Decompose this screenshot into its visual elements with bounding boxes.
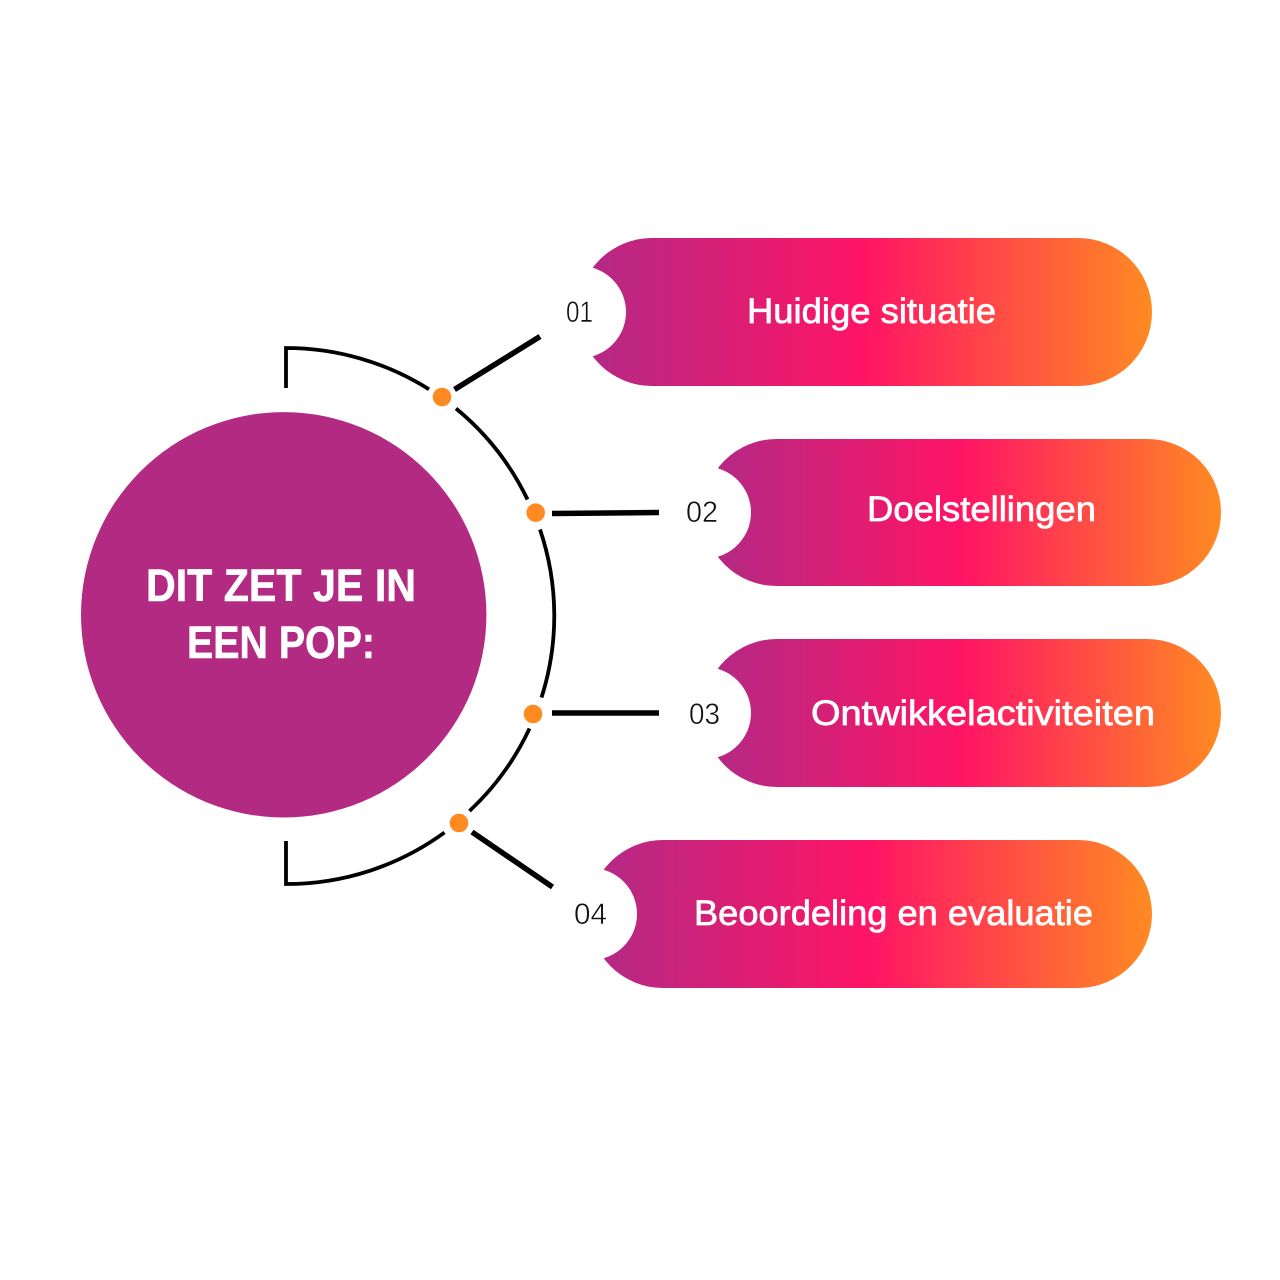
pill 02: Doelstellingen: Doelstellingen [867,490,1096,529]
pill 01: Huidige situatie: Huidige situatie [747,292,996,331]
pill 03: Ontwikkelactiviteiten [659,639,1221,787]
pill 01: Huidige situatie [534,238,1152,386]
pill 04: Beoordeling en evaluatie: 04 [574,898,607,931]
pill 03: Ontwikkelactiviteiten: Ontwikkelactiviteiten [811,694,1155,733]
central circle with title: DIT ZET JE IN [146,560,416,611]
central circle with title [81,412,486,818]
pill 02: Doelstellingen: 02 [686,496,718,529]
pill 03: Ontwikkelactiviteiten: 03 [689,698,720,731]
pill 04: Beoordeling en evaluatie: Beoordeling en evaluatie [694,894,1093,933]
connector lines [454,336,659,887]
central circle with title: EEN POP: [187,617,375,668]
pill 01: Huidige situatie: 01 [566,296,593,329]
pill 02: Doelstellingen [659,439,1221,586]
outer arc bracket [286,348,554,884]
pill 04: Beoordeling en evaluatie [545,840,1152,988]
orange connector dots [433,388,545,832]
